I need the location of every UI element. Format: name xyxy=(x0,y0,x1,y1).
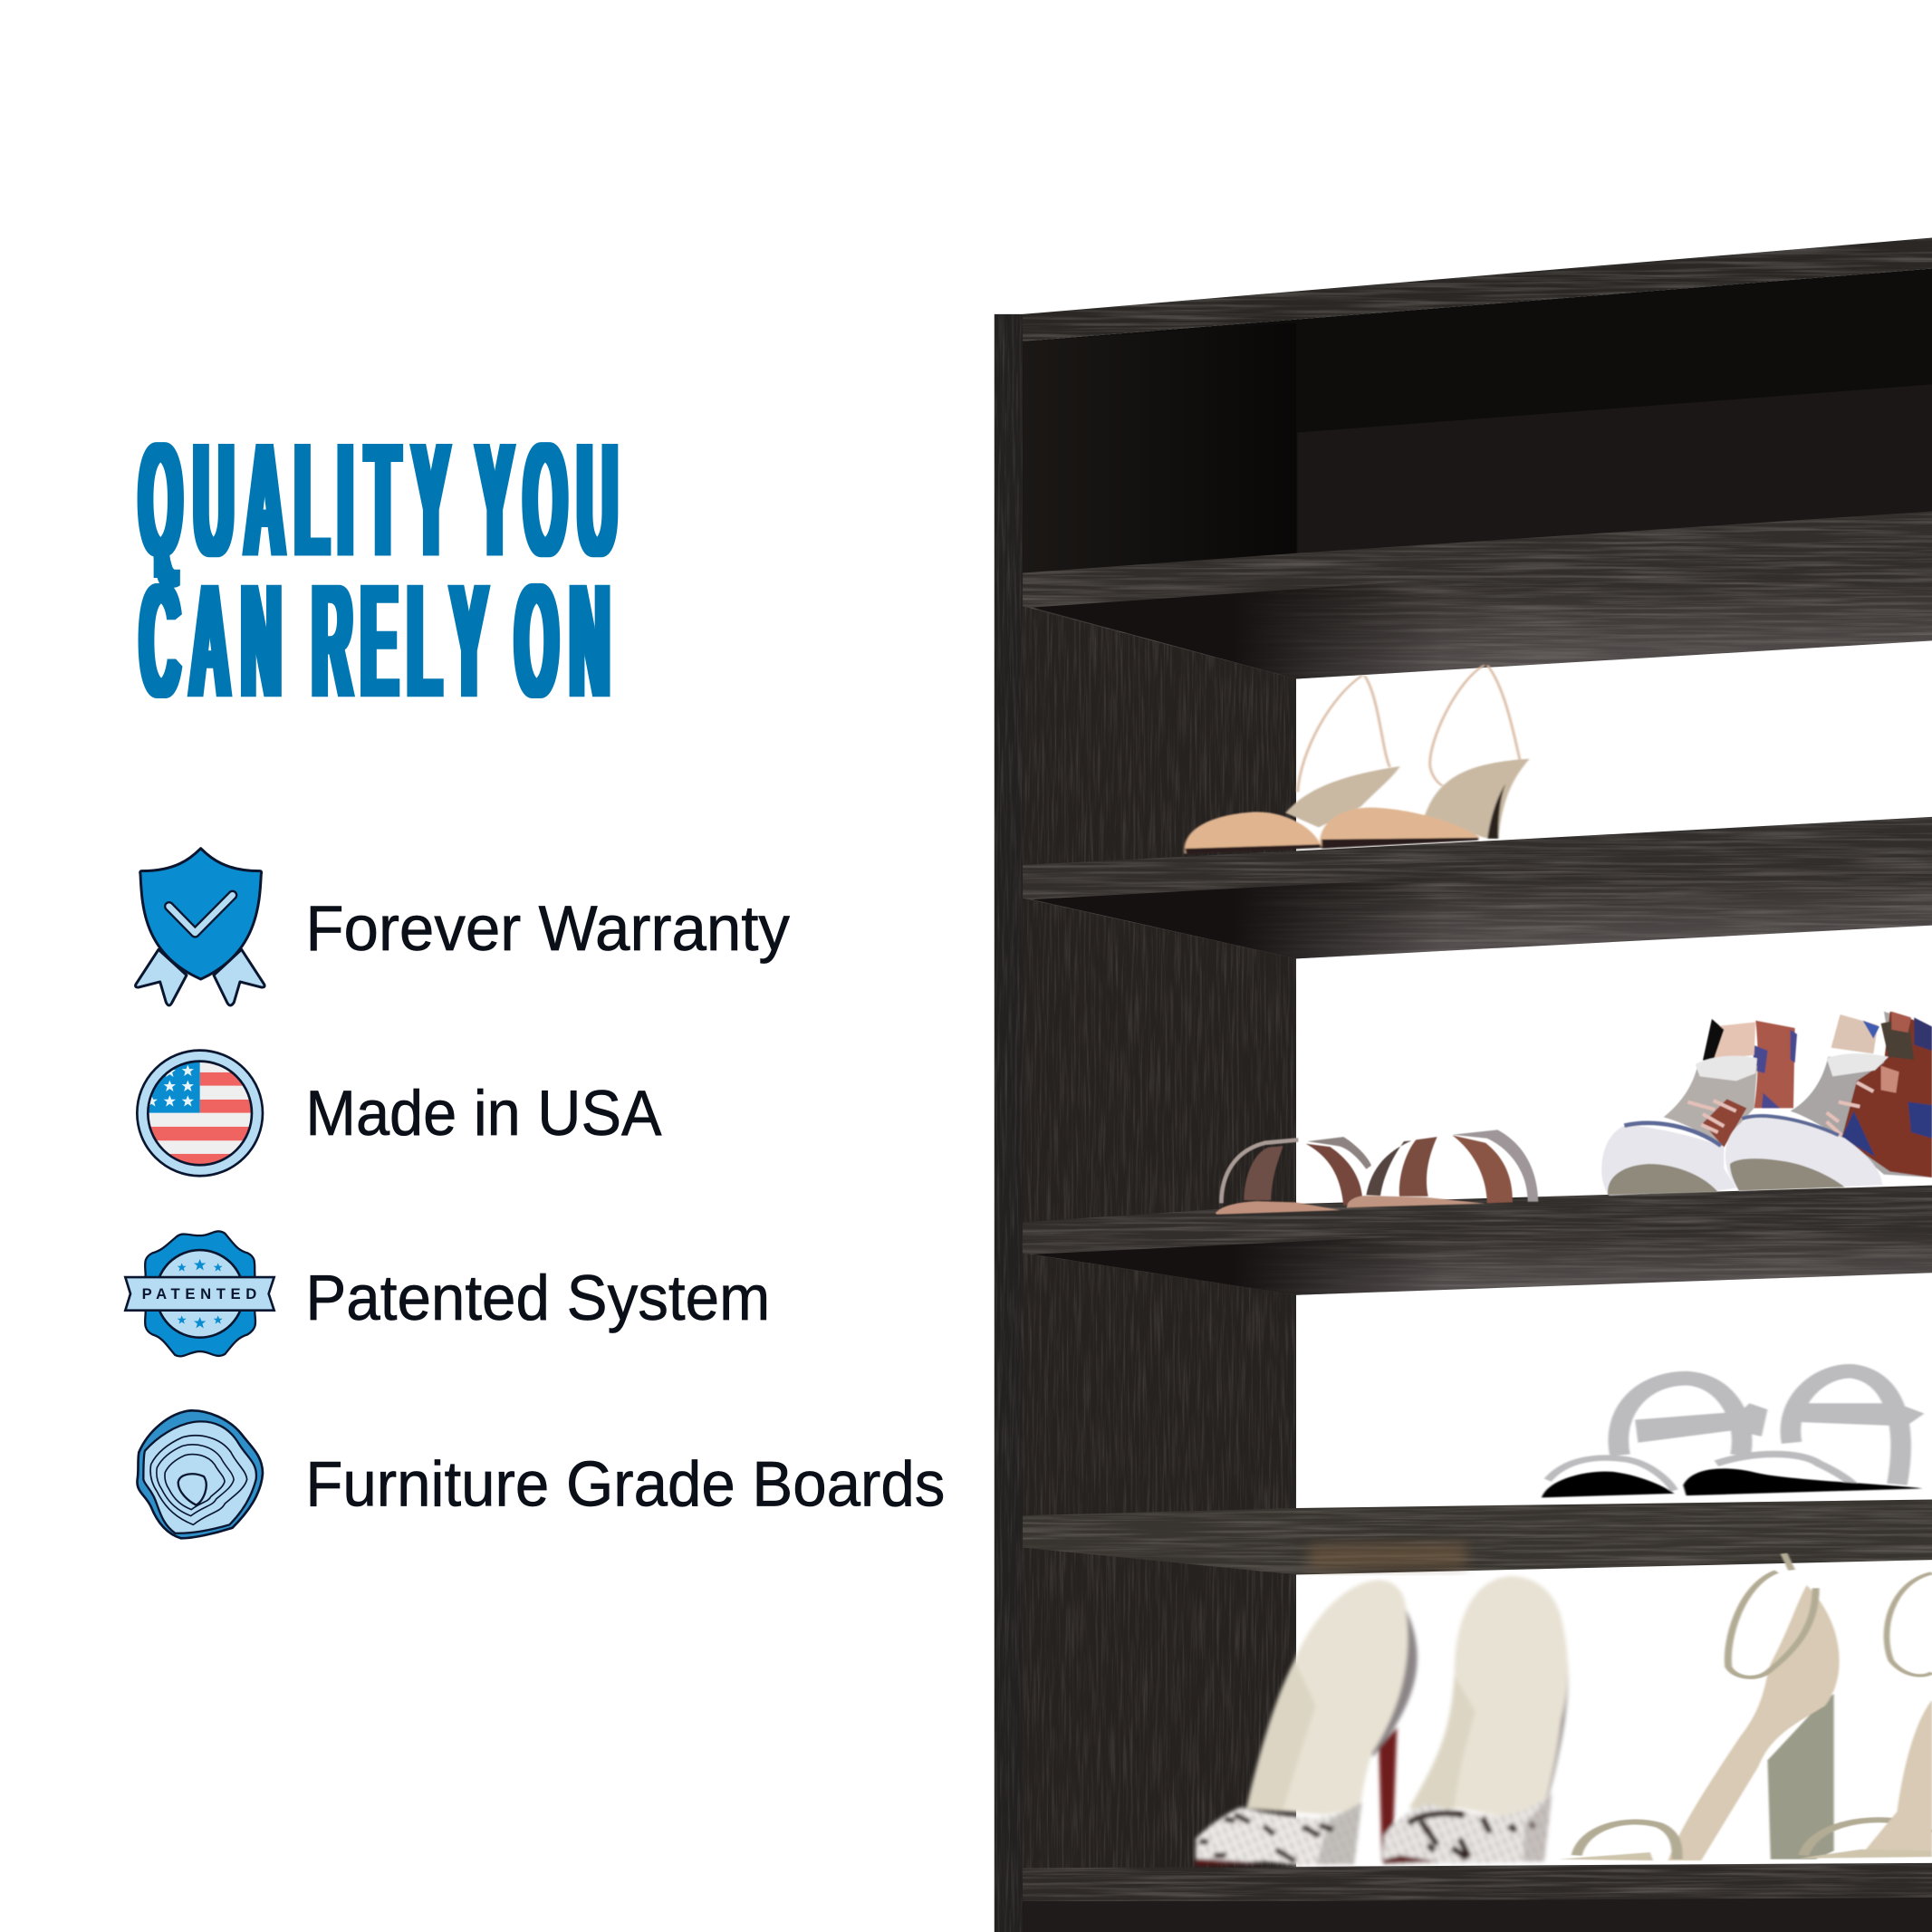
open bay 2 xyxy=(1296,926,1932,1207)
lower dark plinth xyxy=(1023,1895,1932,1932)
icon: shield with ribbons xyxy=(136,849,264,1005)
shelf 3 xyxy=(1023,1186,1932,1295)
shoes: nude block-heel sandals xyxy=(1559,1553,1932,1860)
side panel xyxy=(1023,604,1296,1932)
title: QUALITY YOU xyxy=(139,410,618,591)
label: patented system: Patented System xyxy=(305,1262,770,1333)
shoes: snakeskin stiletto pumps xyxy=(1196,1576,1568,1865)
open bay 1 xyxy=(1296,640,1932,852)
shoes: beige slingbacks xyxy=(1184,665,1530,854)
label: made in usa: Made in USA xyxy=(305,1077,662,1149)
shelf 3 underside shade xyxy=(1033,1235,1442,1295)
top compartment back board xyxy=(1297,384,1932,554)
label: furniture grade boards: Furniture Grade Boards xyxy=(305,1447,945,1519)
title xyxy=(139,410,618,732)
shelf 4 warm reflection xyxy=(1309,1543,1466,1570)
rack outer post xyxy=(995,314,1024,1932)
top compartment side wall xyxy=(1023,322,1296,574)
shelf 1 xyxy=(1023,512,1932,679)
open bay 4 xyxy=(1296,1560,1932,1868)
feature: made in usa xyxy=(137,1051,662,1176)
feature: furniture grade boards xyxy=(137,1410,945,1538)
icon: american flag badge xyxy=(137,1051,263,1176)
label: forever warranty: Forever Warranty xyxy=(305,892,791,964)
shelf 2 xyxy=(1023,817,1932,958)
shelf 2 underside shade xyxy=(1033,878,1442,958)
shoe rack xyxy=(995,238,1932,1932)
icon: tree rings xyxy=(137,1410,263,1538)
shoes: brown strap sandals xyxy=(1216,1129,1538,1215)
shelf 4 xyxy=(1023,1500,1932,1575)
icon: patented seal xyxy=(125,1231,274,1356)
shoes: patterned high-top sneakers xyxy=(1601,1012,1932,1196)
open bay 3 xyxy=(1296,1273,1932,1511)
feature: patented system xyxy=(125,1231,770,1356)
shoes: silver strap sandals xyxy=(1542,1371,1924,1497)
shelf 1 underside shade xyxy=(1033,579,1442,679)
title: CAN RELY ON xyxy=(140,552,610,732)
top board xyxy=(1023,238,1932,341)
shelf 5 xyxy=(1023,1863,1932,1901)
icon: patented seal: PATENTED xyxy=(142,1285,256,1302)
top compartment recess xyxy=(1023,269,1932,574)
feature: forever warranty xyxy=(136,849,791,1005)
